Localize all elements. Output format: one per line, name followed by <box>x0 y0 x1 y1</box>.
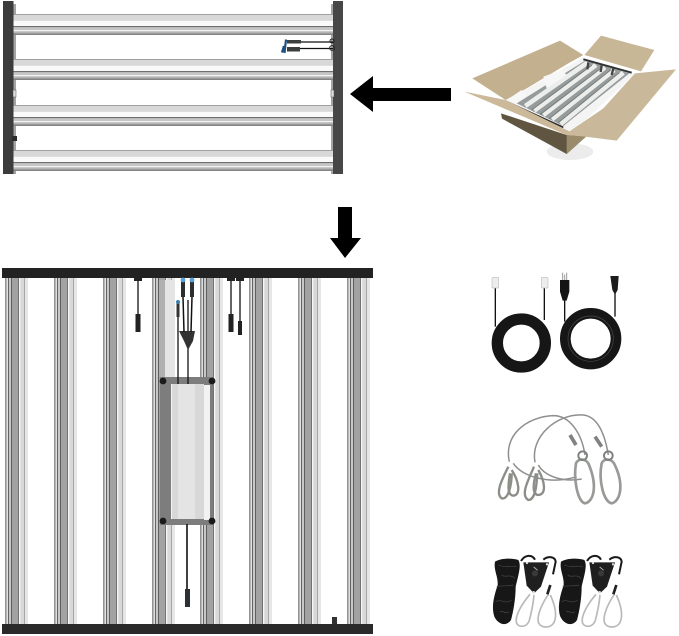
back right flap <box>584 36 654 71</box>
bottom rail <box>2 624 373 634</box>
right rail <box>333 1 343 174</box>
carton shadow <box>547 143 593 160</box>
top rail <box>2 268 373 278</box>
unfolded light fixture <box>2 268 373 634</box>
data cable coil <box>492 277 548 367</box>
driver mounting bracket <box>160 377 213 525</box>
connector cables <box>282 39 334 53</box>
rail brackets <box>12 90 334 141</box>
arrow: down to unfolded light <box>330 207 361 258</box>
icon: rope ratchet hangers left pair <box>493 556 556 627</box>
steel wire loops <box>508 415 608 480</box>
carabiner eyes <box>570 435 613 460</box>
driver cables <box>176 278 195 607</box>
bottom rail stud <box>332 617 337 624</box>
translucent bar behind cable <box>159 280 175 377</box>
light bars <box>5 278 370 624</box>
light bars <box>13 14 333 171</box>
power cable coil <box>560 273 619 364</box>
white gap behind driver cables <box>175 520 200 624</box>
icon: rope ratchet hangers right pair <box>559 556 622 627</box>
assembled light top view <box>3 1 343 174</box>
rail end shading <box>13 4 334 174</box>
icon: open shipping carton <box>464 36 676 160</box>
front left flap <box>464 92 586 137</box>
front right flap <box>567 69 676 141</box>
back left flap <box>472 41 583 100</box>
left rail <box>3 1 14 174</box>
carton body <box>501 113 586 154</box>
bracket screws <box>160 378 215 524</box>
icon: steel safety cables with carabiners <box>499 415 620 503</box>
arrow: left from box to light <box>350 76 451 112</box>
driver box <box>171 384 204 519</box>
hanging connectors <box>134 278 244 335</box>
carabiners <box>575 460 620 503</box>
icon: power and data cable coils <box>492 273 619 367</box>
packed light bars <box>506 57 635 133</box>
thimble loops <box>499 467 544 500</box>
